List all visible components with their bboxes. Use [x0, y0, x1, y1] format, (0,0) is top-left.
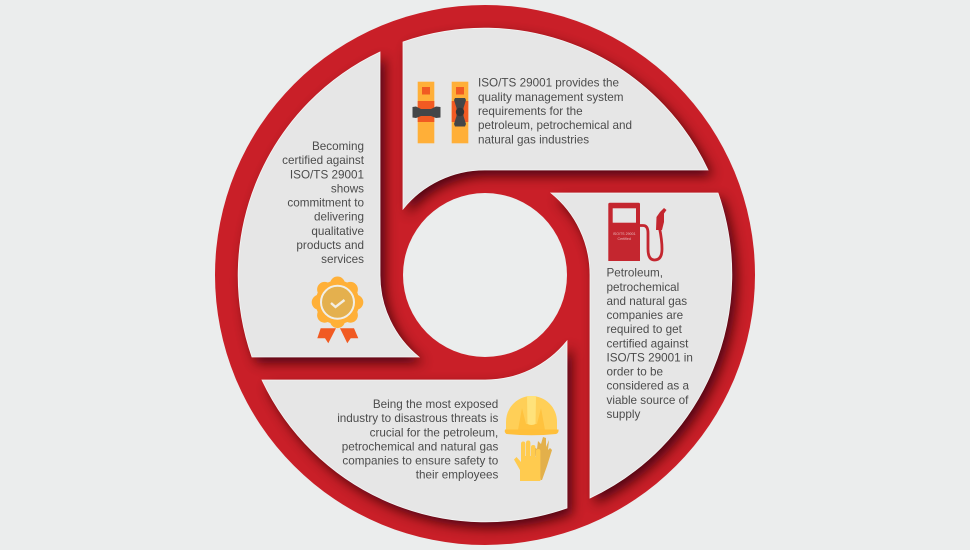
text: right panel: [606, 267, 693, 421]
text: bottom panel: industry to disastrous threats is: [337, 412, 498, 425]
text: right panel: certified against: [606, 337, 689, 350]
text: left panel: [282, 140, 365, 266]
text: top panel: [478, 77, 632, 146]
text: bottom panel: crucial for the petroleum,: [370, 426, 498, 439]
text: right panel: companies are: [606, 309, 683, 322]
text: right panel: considered as a: [606, 380, 690, 393]
text: right panel: Petroleum,: [606, 267, 663, 280]
icon: valves: [412, 82, 468, 143]
left panel shape: [238, 52, 419, 357]
text: top panel: quality management system: [478, 91, 624, 104]
text: right panel: order to be: [606, 366, 663, 379]
icon: gloves: [514, 437, 552, 481]
text: left panel: certified against: [282, 154, 365, 167]
text: left panel: delivering: [314, 211, 364, 224]
circular infographic: [215, 5, 755, 545]
top panel shape: [403, 28, 708, 209]
panel: top: [403, 28, 708, 209]
text: top panel: requirements for the: [478, 105, 583, 118]
text: bottom panel: companies to ensure safety to: [342, 454, 499, 468]
text: left panel: shows: [331, 182, 364, 195]
panel: right: [551, 193, 732, 498]
icon: fuel pump: Certified: [618, 237, 631, 241]
icon: award badge: [312, 276, 363, 343]
text: right panel: required to get: [606, 323, 683, 336]
text: right panel: and natural gas: [606, 295, 687, 308]
icon: fuel pump: [608, 203, 666, 261]
centre hole: [403, 193, 567, 357]
red ring: [215, 5, 755, 545]
icon: hard hat: [505, 396, 559, 435]
panel shadows: [243, 34, 737, 528]
text: left panel: commitment to: [287, 196, 364, 210]
text: top panel: petroleum, petrochemical and: [478, 119, 632, 132]
text: left panel: products and: [296, 239, 364, 252]
panel: left: [238, 52, 419, 357]
panel: bottom: [262, 341, 567, 522]
text: right panel: petrochemical: [606, 281, 679, 294]
text: left panel: ISO/TS 29001: [290, 168, 364, 181]
text: left panel: services: [321, 253, 364, 266]
icon: fuel pump: ISO/TS 29001: [613, 232, 636, 236]
text: bottom panel: their employees: [416, 469, 498, 482]
text: right panel: viable source of: [606, 394, 689, 407]
text: left panel: Becoming: [312, 140, 364, 153]
text: bottom panel: Being the most exposed: [373, 398, 498, 411]
text: right panel: supply: [606, 408, 640, 421]
text: top panel: natural gas industries: [478, 133, 589, 146]
text: top panel: ISO/TS 29001 provides the: [478, 77, 619, 90]
right panel shape: [551, 193, 732, 498]
text: left panel: qualitative: [311, 225, 364, 238]
text: right panel: ISO/TS 29001 in: [606, 352, 693, 364]
bottom panel shape: [262, 341, 567, 522]
text: bottom panel: [337, 398, 499, 482]
text: bottom panel: petrochemical and natural gas: [342, 440, 498, 453]
